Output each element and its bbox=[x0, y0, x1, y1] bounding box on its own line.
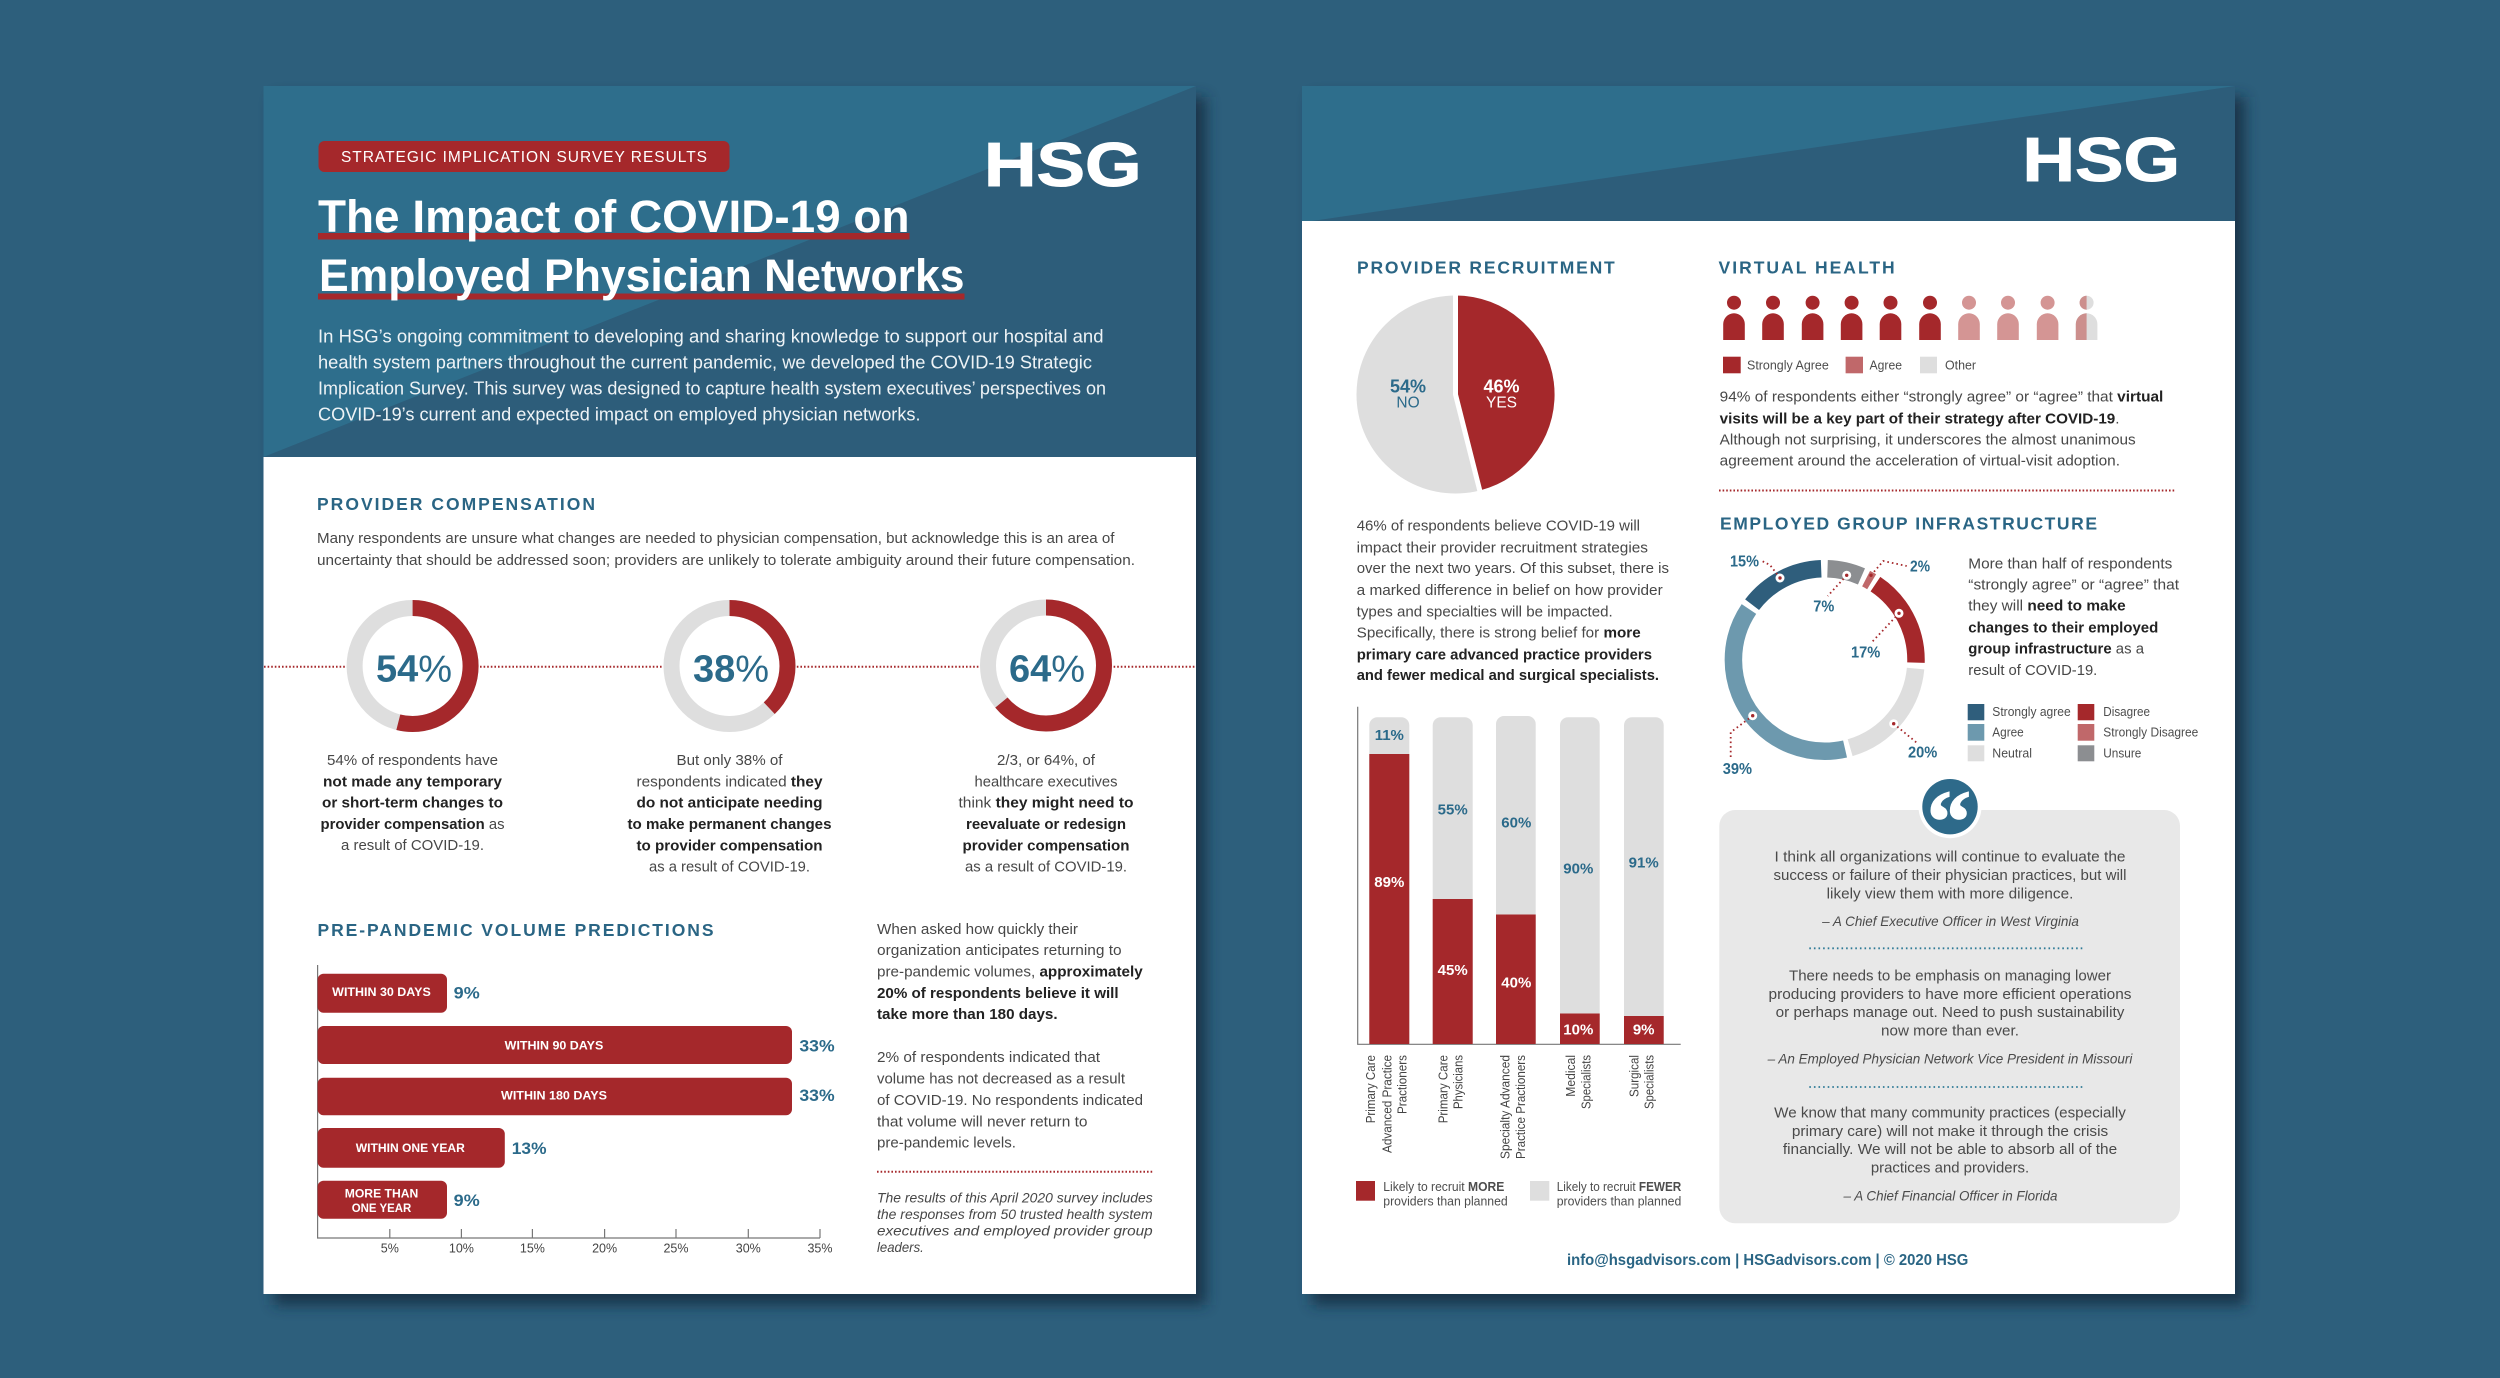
heading: provider recruitment: PROVIDER RECRUITMENT bbox=[1357, 257, 1615, 277]
volume text block: 2% of respondents indicated that bbox=[877, 1049, 1101, 1066]
quote 1 bbox=[1774, 849, 2126, 929]
donut: 38% bbox=[664, 600, 796, 732]
caption: 54% bbox=[320, 752, 504, 854]
quote 1: I think all organizations will continue to evaluate the bbox=[1774, 849, 2126, 866]
caption: 38%: to make permanent changes bbox=[628, 816, 832, 833]
horizontal bar chart: 33% bbox=[799, 1086, 835, 1105]
caption: 54%: provider compensation as bbox=[320, 816, 504, 833]
segmented donut chart: 15% bbox=[1730, 554, 1759, 571]
horizontal bar chart: 33% bbox=[799, 1037, 835, 1056]
stacked bar chart: 11% bbox=[1375, 727, 1404, 744]
caption: 38%: to provider compensation bbox=[636, 837, 822, 854]
volume text block: volume has not decreased as a result bbox=[877, 1071, 1126, 1088]
intro paragraph: COVID-19’s current and expected impact on employed physician networks. bbox=[318, 404, 920, 424]
stacked bar chart: 89% bbox=[1374, 874, 1404, 891]
infrastructure paragraph: group infrastructure as a bbox=[1968, 640, 2145, 657]
donut legend: Neutral bbox=[1992, 747, 2032, 761]
page 1 bbox=[264, 86, 1196, 1294]
quote 1: likely view them with more diligence. bbox=[1827, 885, 2073, 902]
stacked bar chart: 45% bbox=[1438, 962, 1468, 979]
horizontal bar chart: WITHIN 30 DAYS bbox=[332, 987, 431, 999]
infrastructure paragraph: they will need to make bbox=[1968, 598, 2126, 615]
stacked bar chart: Advanced Practice bbox=[1381, 1055, 1395, 1153]
survey note: The results of this April 2020 survey includes bbox=[877, 1190, 1153, 1206]
caption: 54%: 54% of respondents have bbox=[327, 752, 498, 769]
horizontal bar chart bbox=[318, 965, 835, 1256]
quote 2: There needs to be emphasis on managing lower bbox=[1789, 968, 2111, 985]
horizontal bar chart: 5% bbox=[381, 1242, 399, 1256]
quote 3: We know that many community practices (especially bbox=[1774, 1105, 2126, 1122]
recruitment paragraph: over the next two years. Of this subset, there is bbox=[1357, 560, 1669, 577]
intro paragraph: In HSG’s ongoing commitment to developing and sharing knowledge to support our hospital and bbox=[318, 326, 1104, 346]
stacked bar chart: 10% bbox=[1563, 1021, 1593, 1038]
HSG logo: HSG bbox=[2022, 126, 2180, 195]
recruitment paragraph: a marked difference in belief on how provider bbox=[1357, 582, 1663, 599]
horizontal bar chart: WITHIN ONE YEAR bbox=[356, 1143, 466, 1155]
horizontal bar chart: 9% bbox=[454, 1191, 480, 1210]
compensation paragraph: Many respondents are unsure what changes are needed to physician compensation, but acknowledge this is an area of bbox=[317, 530, 1115, 547]
quote 3: financially. We will not be able to absorb all of the bbox=[1783, 1141, 2117, 1158]
caption: 54%: or short-term changes to bbox=[322, 795, 503, 812]
bar chart legend: Likely to recruit FEWER bbox=[1557, 1180, 1681, 1194]
donut: 54%: 54% bbox=[376, 649, 452, 691]
survey note bbox=[877, 1190, 1153, 1255]
stacked bar chart bbox=[1358, 707, 1681, 1159]
donut: 54% bbox=[347, 600, 479, 732]
quote 2 bbox=[1767, 968, 2133, 1066]
stacked bar chart: Primary Care bbox=[1436, 1055, 1450, 1123]
pictogram: people bbox=[1723, 296, 2097, 340]
quote 3: primary care) will not make it through the crisis bbox=[1792, 1123, 2108, 1140]
horizontal bar chart: MORE THAN bbox=[345, 1189, 418, 1201]
quote 3: practices and providers. bbox=[1871, 1160, 2029, 1177]
caption: 38%: But only 38% of bbox=[676, 752, 783, 769]
caption: 64%: healthcare executives bbox=[974, 773, 1118, 790]
recruitment paragraph: 46% of respondents believe COVID-19 will bbox=[1357, 518, 1640, 535]
pie chart: recruitment: NO bbox=[1396, 395, 1420, 412]
bar chart legend: providers than planned bbox=[1383, 1195, 1508, 1209]
segmented donut chart: 20% bbox=[1908, 744, 1937, 761]
donut: 38%: 38% bbox=[693, 649, 769, 691]
recruitment paragraph: types and specialties will be impacted. bbox=[1357, 604, 1613, 621]
quote icon bbox=[1918, 774, 1982, 871]
horizontal bar chart: WITHIN 180 DAYS bbox=[501, 1091, 607, 1103]
pictogram legend: Agree bbox=[1870, 358, 1902, 372]
segmented donut chart bbox=[1723, 554, 1937, 778]
volume text block bbox=[877, 921, 1143, 1151]
stacked bar chart: Specialists bbox=[1642, 1055, 1656, 1109]
stacked bar chart: Practice Practioners bbox=[1514, 1055, 1528, 1159]
quotes panel bbox=[1719, 774, 2180, 1223]
footer contact line: info@hsgadvisors.com | HSGadvisors.com | © 2020 HSG bbox=[1567, 1252, 1968, 1269]
segmented donut chart: 7% bbox=[1813, 599, 1834, 616]
compensation paragraph bbox=[317, 530, 1135, 569]
pie chart: recruitment: YES bbox=[1486, 395, 1517, 412]
intro paragraph: Implication Survey. This survey was designed to capture health system executives’ perspectives on bbox=[318, 378, 1106, 398]
donut legend: Unsure bbox=[2103, 747, 2141, 761]
survey note: executives and employed provider group bbox=[877, 1223, 1153, 1239]
survey note: leaders. bbox=[877, 1239, 924, 1255]
caption: 54%: a result of COVID-19. bbox=[341, 837, 484, 854]
survey badge: STRATEGIC IMPLICATION SURVEY RESULTS bbox=[341, 149, 707, 166]
stacked bar chart: Practioners bbox=[1396, 1055, 1410, 1114]
volume text block: When asked how quickly their bbox=[877, 921, 1078, 938]
virtual health paragraph: 94% of respondents either “strongly agree” or “agree” that virtual bbox=[1720, 389, 2163, 406]
recruitment paragraph: Specifically, there is strong belief for more bbox=[1357, 625, 1641, 642]
stacked bar chart: Primary Care bbox=[1364, 1055, 1378, 1123]
quote 2: – An Employed Physician Network Vice President in Missouri bbox=[1767, 1050, 2133, 1066]
compensation paragraph: uncertainty that should be addressed soon; providers are unlikely to tolerate ambiguity around their future compensation. bbox=[317, 552, 1135, 569]
caption: 64%: as a result of COVID-19. bbox=[965, 858, 1127, 876]
bar chart legend bbox=[1356, 1180, 1681, 1209]
quote 2: or perhaps manage out. Need to push sustainability bbox=[1776, 1004, 2125, 1021]
recruitment paragraph: and fewer medical and surgical specialists. bbox=[1357, 667, 1659, 684]
pie chart: recruitment: 46% bbox=[1483, 377, 1520, 397]
pictogram legend: Strongly Agree bbox=[1747, 358, 1829, 372]
pie chart: recruitment: 54% bbox=[1390, 377, 1426, 397]
quote icon: “ bbox=[1927, 774, 1971, 871]
survey badge bbox=[318, 141, 730, 172]
caption: 38%: do not anticipate needing bbox=[636, 795, 822, 812]
quote 2: producing providers to have more efficient operations bbox=[1768, 986, 2132, 1003]
volume text block: 20% of respondents believe it will bbox=[877, 985, 1119, 1002]
volume text block: of COVID-19. No respondents indicated bbox=[877, 1092, 1143, 1109]
stacked bar chart: 90% bbox=[1563, 861, 1593, 878]
caption: 38%: as a result of COVID-19. bbox=[649, 858, 810, 876]
donut: 64%: 64% bbox=[1009, 649, 1085, 691]
infrastructure paragraph bbox=[1968, 555, 2180, 679]
segmented donut chart: 17% bbox=[1851, 645, 1880, 662]
title: Employed Physician Networks bbox=[319, 250, 964, 301]
horizontal bar chart: 30% bbox=[736, 1242, 761, 1256]
caption: 64%: think they might need to bbox=[958, 795, 1134, 812]
donut: 64% bbox=[980, 600, 1112, 732]
donut legend: Disagree bbox=[2103, 705, 2150, 719]
donut legend: Strongly Disagree bbox=[2103, 726, 2198, 740]
quote 1: – A Chief Executive Officer in West Virginia bbox=[1821, 913, 2079, 929]
virtual health paragraph bbox=[1720, 389, 2163, 470]
donut legend: Strongly agree bbox=[1992, 705, 2071, 719]
intro paragraph bbox=[318, 326, 1106, 424]
bar chart legend: Likely to recruit MORE bbox=[1383, 1180, 1504, 1194]
horizontal bar chart: ONE YEAR bbox=[352, 1203, 412, 1215]
page 2 bbox=[1302, 86, 2235, 1294]
heading: pre-pandemic volume predictions: PRE-PANDEMIC VOLUME PREDICTIONS bbox=[318, 920, 714, 940]
stacked bar chart: 55% bbox=[1438, 801, 1468, 818]
stacked bar chart: Specialty Advanced bbox=[1498, 1055, 1512, 1159]
horizontal bar chart: 10% bbox=[449, 1242, 474, 1256]
horizontal bar chart: WITHIN 90 DAYS bbox=[505, 1041, 604, 1053]
caption: 64%: 2/3, or 64%, of bbox=[997, 752, 1096, 769]
caption: 64%: reevaluate or redesign bbox=[966, 816, 1126, 833]
quote 1: success or failure of their physician practices, but will bbox=[1774, 867, 2126, 884]
pie chart: recruitment bbox=[1356, 294, 1555, 494]
horizontal bar chart: 15% bbox=[520, 1242, 545, 1256]
pictogram legend: Other bbox=[1945, 358, 1976, 372]
caption: 54%: not made any temporary bbox=[323, 773, 503, 790]
stacked bar chart: 60% bbox=[1501, 815, 1531, 832]
page 2 header band bbox=[1302, 86, 2235, 221]
quote 3 bbox=[1774, 1105, 2126, 1203]
bar chart legend: providers than planned bbox=[1557, 1195, 1681, 1209]
infrastructure paragraph: changes to their employed bbox=[1968, 619, 2158, 636]
horizontal bar chart: 9% bbox=[454, 984, 480, 1003]
caption: 38% bbox=[628, 752, 832, 876]
page 1 header band bbox=[264, 86, 1196, 457]
intro paragraph: health system partners throughout the current pandemic, we developed the COVID-19 Strategic bbox=[318, 352, 1092, 372]
horizontal bar chart: 25% bbox=[663, 1242, 689, 1256]
stacked bar chart: Physicians bbox=[1452, 1055, 1466, 1109]
HSG logo: HSG bbox=[984, 131, 1142, 200]
volume text block: pre-pandemic volumes, approximately bbox=[877, 964, 1143, 981]
title: The Impact of COVID-19 on bbox=[318, 191, 910, 242]
donut legend bbox=[1968, 704, 2198, 761]
infrastructure paragraph: More than half of respondents bbox=[1968, 555, 2172, 572]
caption: 64%: provider compensation bbox=[962, 837, 1130, 854]
virtual health paragraph: Although not surprising, it underscores the almost unanimous bbox=[1720, 431, 2136, 448]
pictogram legend bbox=[1723, 357, 1976, 373]
recruitment paragraph: impact their provider recruitment strategies bbox=[1357, 539, 1648, 556]
heading: provider compensation: PROVIDER COMPENSATION bbox=[317, 494, 595, 514]
survey note: the responses from 50 trusted health system bbox=[877, 1206, 1153, 1222]
volume text block: organization anticipates returning to bbox=[877, 942, 1122, 959]
volume text block: that volume will never return to bbox=[877, 1114, 1088, 1131]
horizontal bar chart: 20% bbox=[592, 1242, 617, 1256]
stacked bar chart: Specialists bbox=[1580, 1055, 1594, 1109]
horizontal bar chart: 13% bbox=[512, 1139, 546, 1158]
virtual health paragraph: agreement around the acceleration of virtual-visit adoption. bbox=[1720, 453, 2120, 470]
segmented donut chart: 2% bbox=[1910, 559, 1930, 576]
horizontal bar chart: 35% bbox=[807, 1242, 833, 1256]
stacked bar chart: 9% bbox=[1633, 1021, 1655, 1038]
caption: 64% bbox=[958, 752, 1134, 876]
donut legend: Agree bbox=[1992, 726, 2024, 740]
volume text block: pre-pandemic levels. bbox=[877, 1134, 1016, 1151]
quote 2: now more than ever. bbox=[1881, 1023, 2019, 1040]
recruitment paragraph: primary care advanced practice providers bbox=[1357, 646, 1652, 663]
recruitment paragraph bbox=[1357, 518, 1669, 684]
quote 3: – A Chief Financial Officer in Florida bbox=[1843, 1187, 2058, 1203]
stacked bar chart: 40% bbox=[1501, 975, 1531, 992]
stacked bar chart: Surgical bbox=[1627, 1055, 1641, 1097]
stacked bar chart: Medical bbox=[1564, 1055, 1578, 1097]
infrastructure paragraph: result of COVID-19. bbox=[1968, 662, 2097, 679]
title bbox=[318, 191, 964, 301]
caption: 38%: respondents indicated they bbox=[636, 773, 823, 790]
volume text block: take more than 180 days. bbox=[877, 1006, 1058, 1023]
segmented donut chart: 39% bbox=[1723, 761, 1752, 778]
infrastructure paragraph: “strongly agree” or “agree” that bbox=[1968, 576, 2180, 593]
virtual health paragraph: visits will be a key part of their strategy after COVID-19 . bbox=[1720, 410, 2120, 427]
heading: employed group infrastructure: EMPLOYED GROUP INFRASTRUCTURE bbox=[1720, 513, 2097, 533]
heading: virtual health: VIRTUAL HEALTH bbox=[1718, 257, 1895, 277]
stacked bar chart: 91% bbox=[1629, 855, 1659, 872]
